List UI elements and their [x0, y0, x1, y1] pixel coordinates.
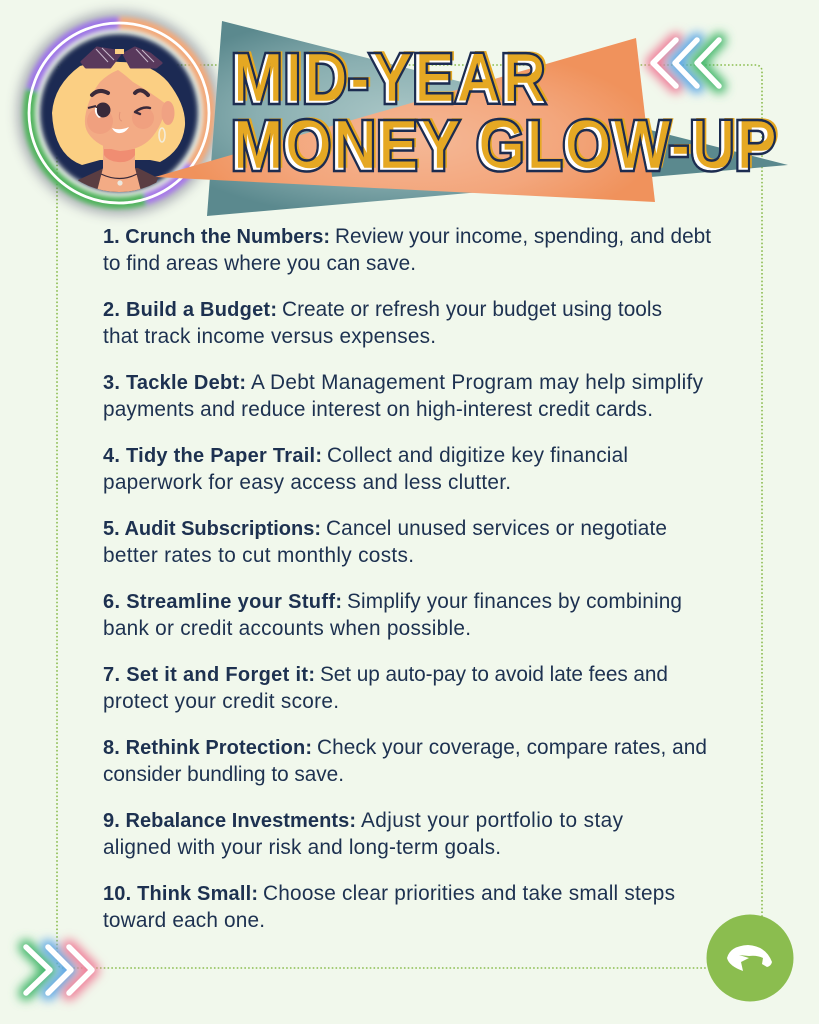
item 6	[103, 590, 682, 640]
item 9: 9. Rebalance Investments:	[103, 810, 356, 832]
cheeks	[87, 108, 113, 134]
title	[232, 51, 778, 173]
item 6: 6. Streamline your Stuff:	[103, 591, 342, 613]
item 9: Adjust your portfolio to stay	[361, 809, 624, 832]
item 3	[103, 371, 704, 421]
neck	[98, 146, 140, 192]
neck shadow	[104, 149, 135, 162]
orange triangle	[155, 38, 655, 202]
ear	[162, 101, 174, 125]
phone badge	[706, 914, 794, 1002]
item 7: Set up auto-pay to avoid late fees and	[320, 663, 668, 686]
item 2: Create or refresh your budget using tools	[282, 298, 662, 321]
glasses bridge	[115, 49, 124, 54]
title: MID-YEAR	[234, 36, 549, 115]
eyebrows	[92, 90, 148, 95]
item 6: bank or credit accounts when possible.	[103, 617, 471, 640]
mouth	[112, 127, 129, 133]
item 4: paperwork for easy access and less clutter.	[103, 471, 511, 494]
teal triangle	[207, 21, 788, 216]
item 1	[103, 225, 711, 275]
item 4: Collect and digitize key financial	[327, 444, 628, 467]
jacket	[78, 168, 158, 192]
item 10: Choose clear priorities and take small steps	[263, 882, 675, 905]
item 1: Review your income, spending, and debt	[335, 225, 711, 248]
item 10	[103, 882, 675, 932]
item 5: better rates to cut monthly costs.	[103, 544, 414, 567]
item 8: Check your coverage, compare rates, and	[317, 736, 707, 759]
item 2: that track income versus expenses.	[103, 325, 436, 348]
item 8: 8. Rethink Protection:	[103, 737, 312, 759]
earring	[159, 128, 165, 142]
item 10: toward each one.	[103, 909, 265, 932]
item 3: 3. Tackle Debt:	[103, 372, 246, 394]
item 5	[103, 517, 667, 567]
chevrons: bottom left	[26, 947, 92, 993]
item 7: protect your credit score.	[103, 690, 339, 713]
item 9: aligned with your risk and long-term goals.	[103, 836, 501, 859]
title: MID-YEAR	[231, 39, 545, 117]
item 3: A Debt Management Program may help simplify	[251, 371, 704, 394]
hair	[52, 62, 185, 165]
item 1: 1. Crunch the Numbers:	[103, 226, 330, 248]
item 8: consider bundling to save.	[103, 763, 344, 786]
wink	[135, 108, 150, 114]
title: MONEY GLOW-UP	[231, 106, 776, 184]
item 7	[103, 663, 668, 713]
item 3: payments and reduce interest on high-interest credit cards.	[103, 398, 653, 421]
face	[85, 70, 166, 151]
item 4	[103, 444, 628, 494]
item 9	[103, 809, 624, 859]
item 7: 7. Set it and Forget it:	[103, 664, 315, 686]
item 1: to find areas where you can save.	[103, 252, 416, 275]
sunglasses	[82, 48, 161, 67]
chevrons: top right	[653, 40, 719, 86]
avatar: glowing ring portrait	[23, 17, 215, 209]
dotted frame	[57, 65, 762, 968]
nose	[119, 112, 122, 121]
item 10: 10. Think Small:	[103, 883, 258, 905]
item 5: Cancel unused services or negotiate	[326, 517, 667, 540]
glasses glare	[96, 48, 154, 62]
item 6: Simplify your finances by combining	[347, 590, 682, 613]
item 8	[103, 736, 707, 786]
title: MONEY GLOW-UP	[234, 103, 779, 182]
item 5: 5. Audit Subscriptions:	[103, 518, 321, 540]
eye	[96, 102, 110, 118]
necklace	[101, 174, 137, 178]
item 2: 2. Build a Budget:	[103, 299, 277, 321]
item 4: 4. Tidy the Paper Trail:	[103, 445, 322, 467]
item 2	[103, 298, 662, 348]
